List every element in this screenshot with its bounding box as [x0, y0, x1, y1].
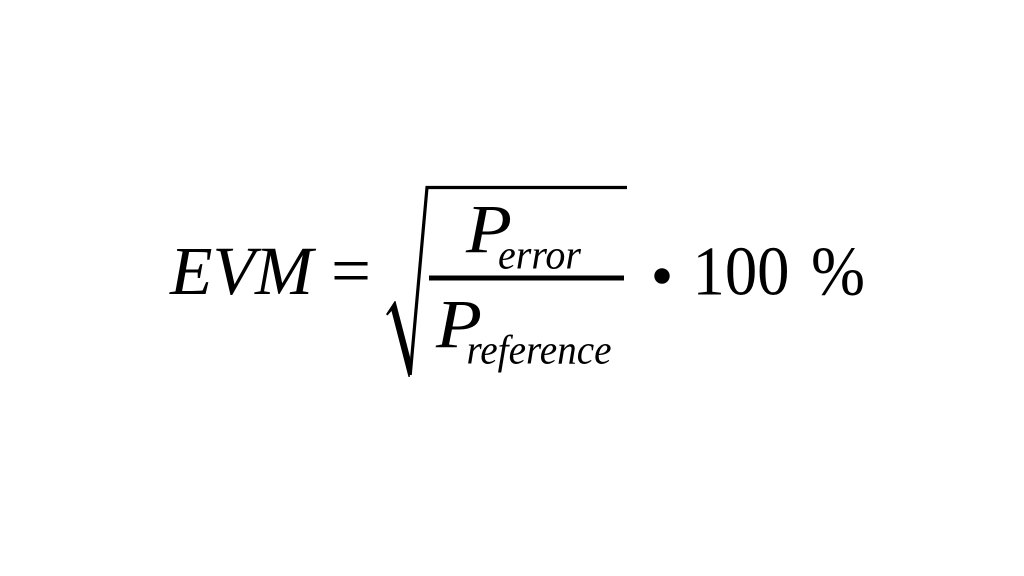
numerator: P error: P [465, 191, 512, 267]
100 percent: 100 [692, 234, 790, 310]
100 percent: % [811, 234, 865, 310]
denominator: P reference [435, 286, 612, 372]
fraction bar [429, 276, 624, 280]
square root sign [386, 188, 627, 377]
equals sign: = [331, 233, 371, 310]
multiplication dot [654, 268, 670, 284]
denominator: P reference: P [435, 286, 482, 362]
numerator: P error: error [498, 232, 582, 278]
denominator: P reference: reference [466, 326, 612, 372]
100 percent [692, 234, 865, 310]
left side: EVM: EVM [169, 233, 317, 309]
numerator: P error [465, 191, 582, 278]
